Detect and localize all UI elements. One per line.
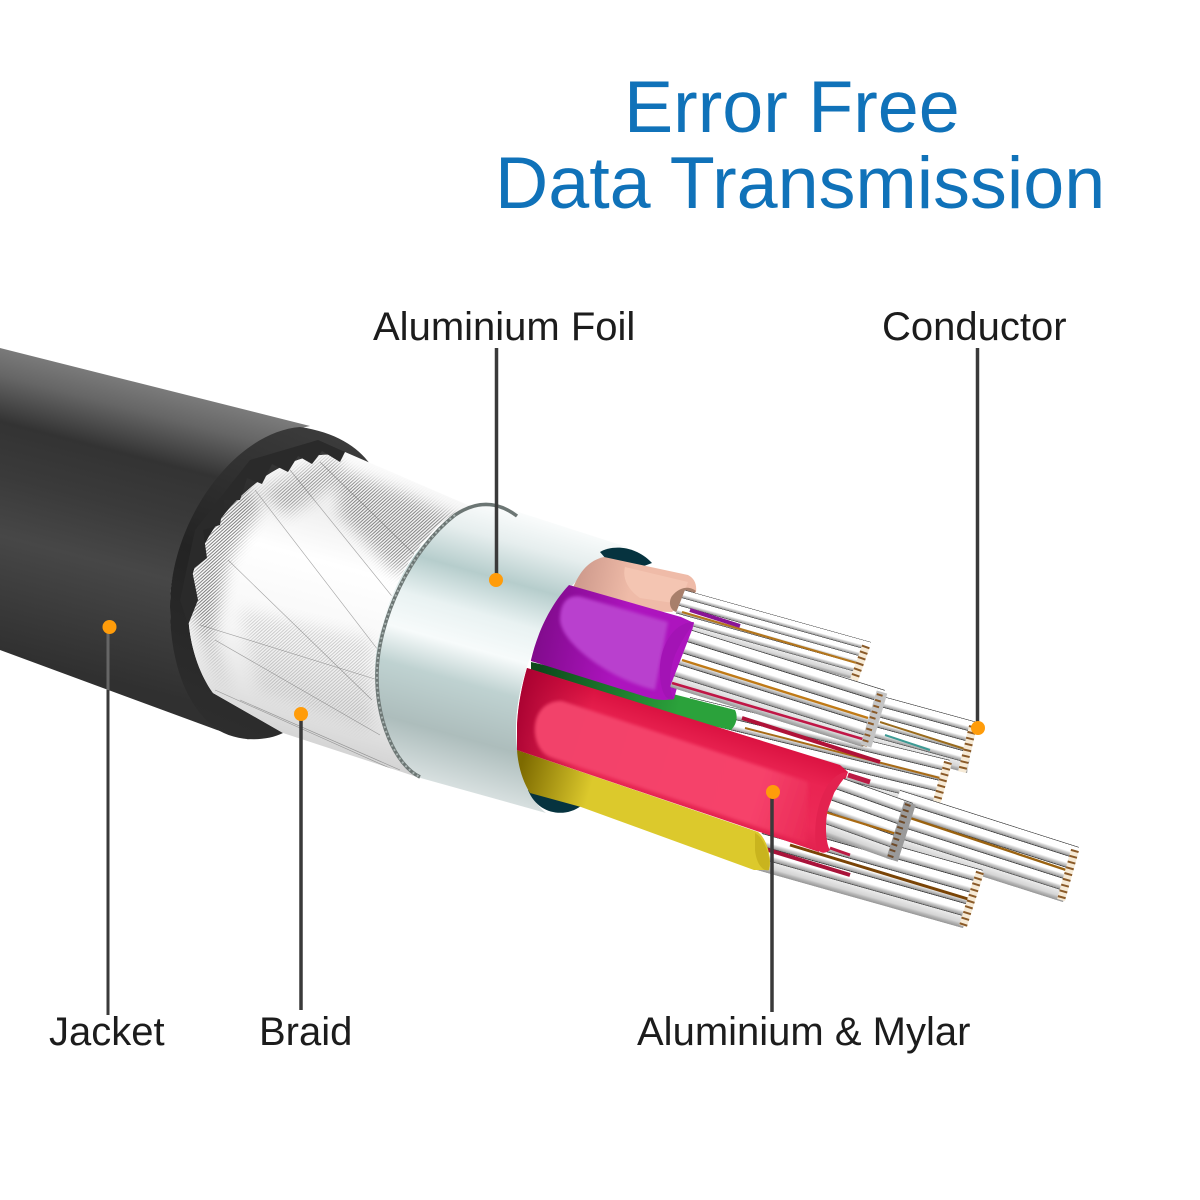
peach insulated wire [572, 557, 696, 612]
yellow insulated wire [517, 750, 770, 870]
green insulated wire [531, 662, 737, 730]
inner cavity [528, 548, 652, 813]
cable jacket [0, 348, 370, 740]
label: conductor: Conductor [882, 305, 1067, 349]
wire bundle: red [815, 772, 913, 860]
leader line: braid [294, 707, 308, 1010]
leader line: conductor [971, 348, 985, 735]
wire bundle: purple [660, 622, 885, 747]
braid shield [188, 440, 465, 776]
title: Data Transmission [495, 141, 1105, 224]
title [495, 65, 1105, 224]
wire bundle: yellow [750, 810, 983, 928]
aluminium foil [375, 504, 627, 813]
leader line: jacket [102, 620, 116, 1015]
leader line: aluminium foil [489, 348, 503, 587]
wire bundle: conductor [850, 690, 977, 773]
purple insulated wire [531, 585, 694, 700]
label: braid: Braid [259, 1010, 352, 1054]
wire bundle: green [675, 697, 950, 813]
label: aluminium and mylar: Aluminium & Mylar [637, 1010, 970, 1054]
leader line: aluminium and mylar [766, 785, 780, 1012]
label: jacket: Jacket [49, 1010, 165, 1054]
title: Error Free [624, 65, 960, 148]
red insulated wire [517, 668, 848, 852]
label: aluminium foil: Aluminium Foil [373, 305, 635, 349]
wire bundle: peach [670, 590, 871, 680]
wire bundle: rear right [884, 790, 1079, 902]
